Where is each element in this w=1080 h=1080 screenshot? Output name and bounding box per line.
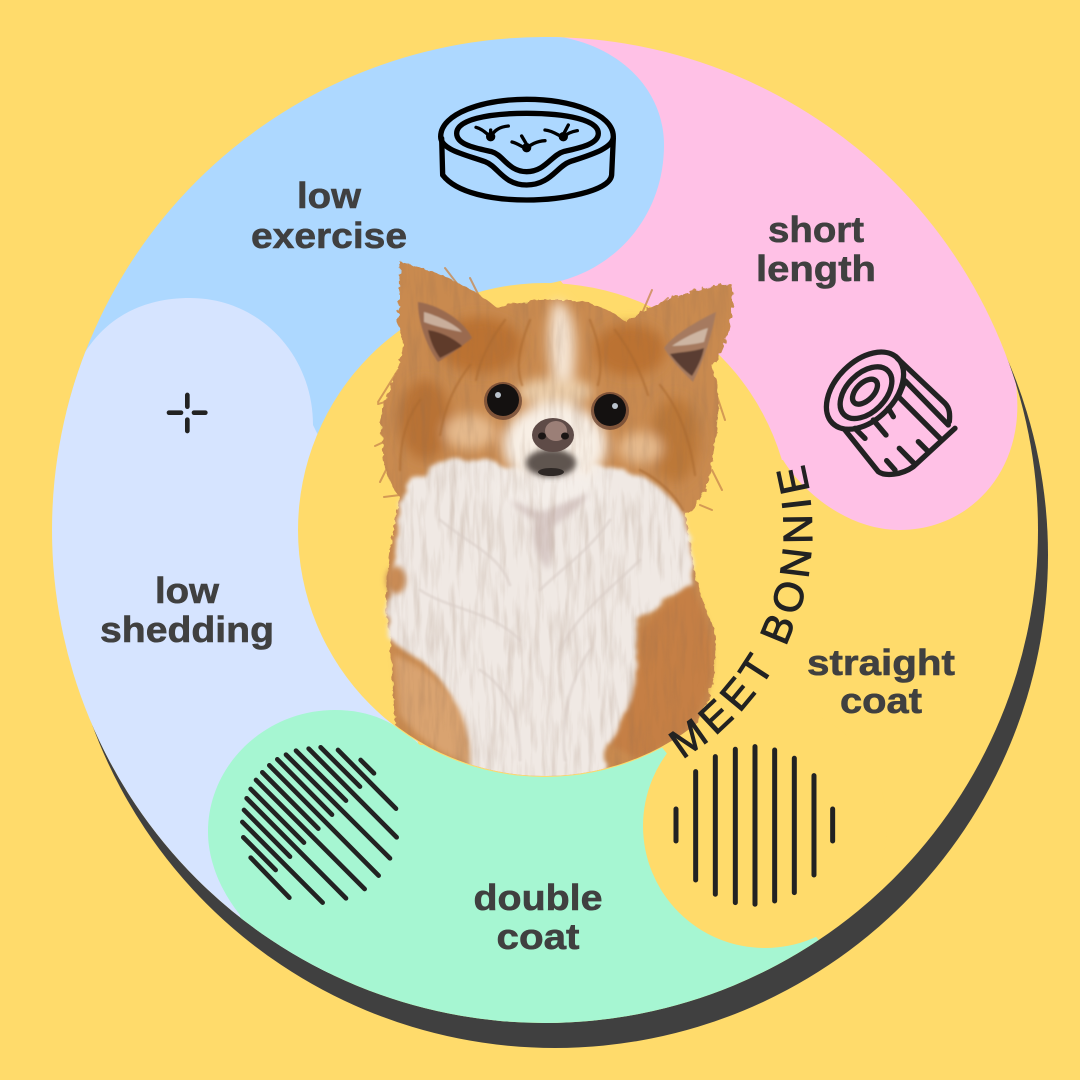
segment: periwinkle low shedding: [52, 298, 418, 973]
nose: [532, 418, 574, 452]
label: straight coat: straight: [807, 642, 955, 683]
dog lower body orange patches: [386, 566, 712, 765]
curved title: meet bonnie: MEET BONNIE: [668, 465, 813, 758]
dog fur silhouette: [380, 262, 733, 790]
label: low exercise: [251, 175, 407, 256]
yellow straight coat blob: [643, 704, 887, 948]
chest crease shadow: [510, 492, 590, 570]
segment: blue low exercise: [66, 37, 664, 434]
pale blaze on forehead: [549, 300, 575, 387]
fur strands: [400, 320, 695, 760]
dog head shading: [399, 300, 699, 510]
label: straight coat: [807, 642, 955, 721]
orange head strands: [400, 320, 695, 510]
label: double coat: double: [474, 877, 602, 918]
dog white chest: [390, 458, 694, 790]
segment: pink short length: [540, 30, 1030, 530]
fur streak texture: [380, 262, 733, 790]
dog photo: Bonnie: [375, 262, 733, 790]
icon: diagonal double coat lines: [242, 747, 397, 903]
icon: dog bed: [441, 99, 613, 200]
label: double coat: coat: [496, 916, 580, 957]
label: low shedding: [100, 570, 274, 650]
left eye: [484, 382, 522, 420]
white chest strands: [420, 520, 640, 760]
left cheek deep: [399, 380, 451, 460]
chin shadow: [526, 449, 576, 477]
right eye: [591, 392, 629, 430]
right shoulder patch: [612, 585, 712, 760]
label: low exercise: low: [297, 175, 362, 216]
right upper head deep orange: [594, 324, 666, 376]
left small patch: [386, 566, 406, 594]
mouth: [538, 468, 564, 476]
right cheek deep: [651, 398, 699, 482]
label: double coat: [474, 877, 602, 957]
left cheek light: [444, 414, 496, 450]
left leg patch: [394, 655, 470, 765]
right ear inner: [664, 312, 716, 382]
label: low shedding: low: [155, 570, 220, 611]
icon: measuring tape: [812, 337, 955, 474]
icon: sparkle crosshair: [169, 395, 205, 431]
left ear inner: [418, 302, 472, 362]
label: straight coat: coat: [840, 680, 922, 721]
segment: green double coat: [208, 710, 818, 1023]
left upper head deep orange: [438, 317, 522, 373]
pale muzzle: [503, 403, 607, 487]
right cheek light: [618, 432, 662, 464]
label: low exercise: exercise: [251, 215, 407, 256]
label: short length: [756, 209, 876, 289]
label: low shedding: shedding: [100, 609, 274, 650]
inner yellow circle: [298, 283, 792, 777]
icon: vertical straight coat lines: [676, 747, 833, 904]
stray hair tufts: [375, 268, 725, 510]
chin to chest white join: [520, 468, 588, 478]
label: short length: short: [768, 209, 864, 250]
label: short length: length: [756, 248, 876, 289]
brow pale: [517, 378, 593, 406]
